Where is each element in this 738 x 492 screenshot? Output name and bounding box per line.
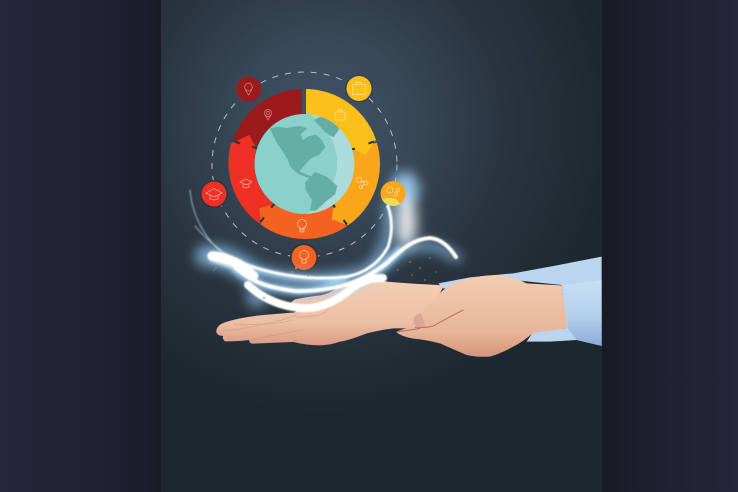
glow behind amber badge bbox=[391, 172, 419, 248]
thumb crease bbox=[397, 310, 463, 332]
segment: red bbox=[228, 135, 275, 224]
palm-up hand bbox=[216, 280, 444, 345]
supporting hand bbox=[396, 275, 567, 357]
thin arcs bbox=[190, 190, 230, 257]
segment: orange bbox=[259, 204, 347, 239]
thumb nail bbox=[414, 313, 425, 327]
badge: briefcase bbox=[345, 74, 373, 102]
infographic: hands holding a globe cycle bbox=[107, 0, 662, 492]
badge: nodes bbox=[380, 181, 406, 206]
ring icon: briefcase bbox=[335, 110, 345, 120]
sparkle particles bbox=[213, 257, 437, 299]
core bloom bbox=[214, 257, 238, 265]
palm creases bbox=[223, 307, 330, 340]
donut cycle ring bbox=[228, 89, 380, 239]
light streaks bbox=[190, 190, 457, 308]
ring icon: pin bbox=[264, 110, 272, 120]
badge: idea bulb bbox=[290, 244, 318, 272]
badge: graduation cap bbox=[200, 180, 228, 208]
segment: yellow bbox=[306, 89, 376, 155]
blue halo strands bbox=[235, 250, 400, 291]
shirt sleeve bbox=[438, 257, 602, 346]
white core bbox=[212, 206, 456, 308]
ring slots bbox=[234, 141, 374, 224]
segment: amber bbox=[332, 143, 380, 225]
ring icon: bulb bbox=[298, 220, 306, 232]
continents bbox=[270, 116, 339, 211]
sleeves and hands bbox=[216, 257, 602, 357]
segment: dark red bbox=[233, 89, 302, 148]
globe bbox=[254, 114, 354, 214]
badge: location bbox=[234, 75, 262, 103]
dashed orbit bbox=[212, 72, 397, 257]
ring icon: graduation cap bbox=[240, 179, 252, 188]
blue glow bbox=[206, 205, 457, 303]
ring icon: nodes bbox=[356, 177, 368, 189]
shirt cuff bbox=[563, 280, 602, 346]
background centre panel bbox=[161, 0, 602, 492]
